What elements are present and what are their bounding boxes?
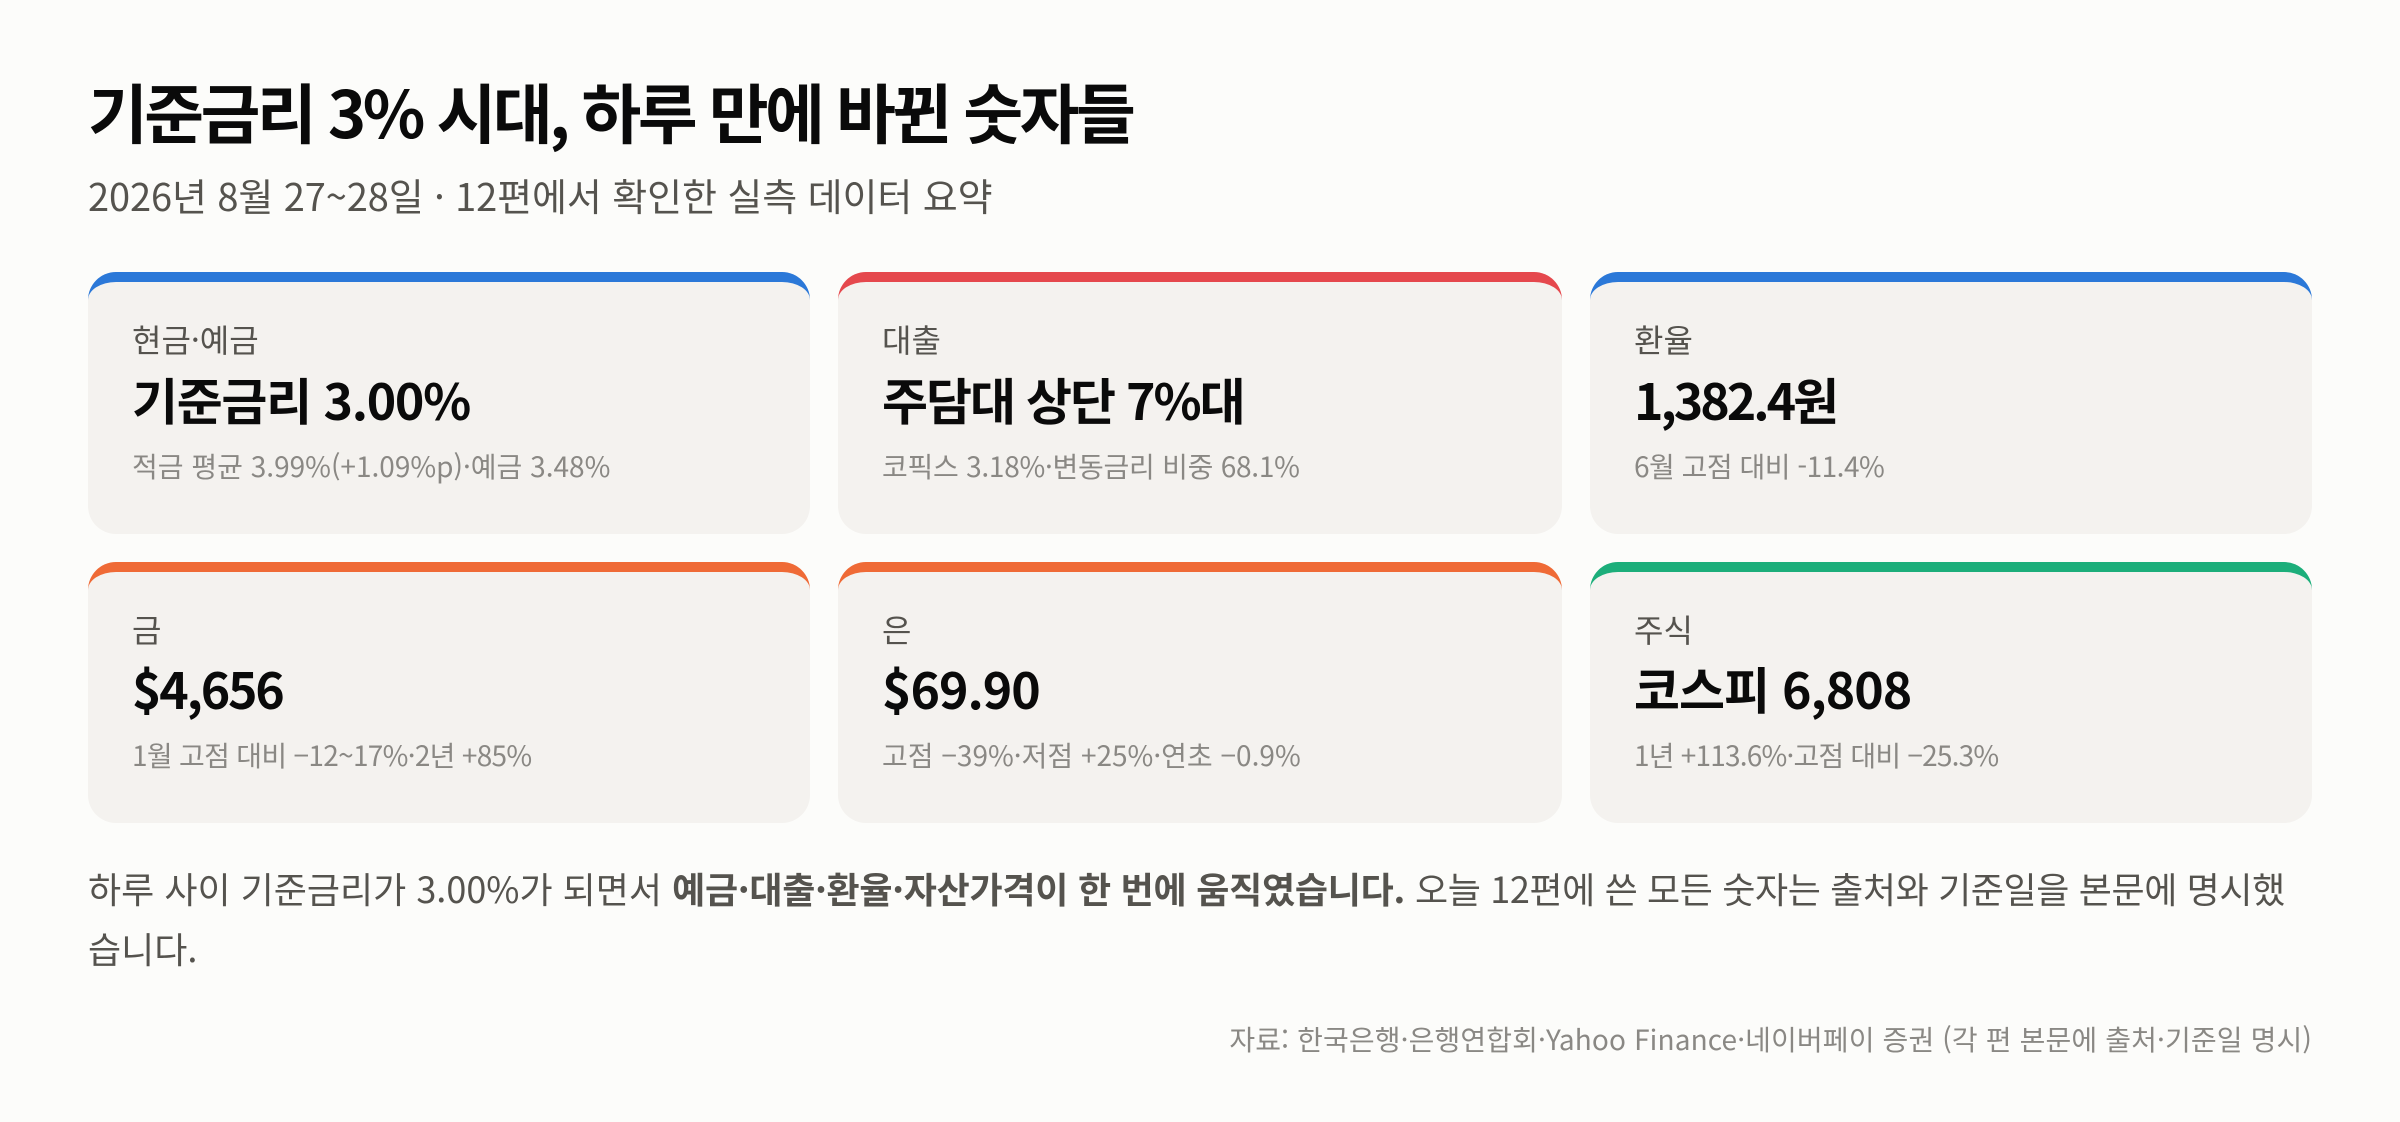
card value: 1,382.4원 [1634,363,1836,435]
summary text: 습니다. [88,922,197,974]
source note: 자료: 한국은행·은행연합회·Yahoo Finance·네이버페이 증권 (각 편 본문에 출처·기준일 명시) [1229,1019,2312,1059]
card value: 기준금리 3.00% [132,363,470,435]
card value: $4,656 [132,652,283,724]
card value: $69.90 [882,652,1040,724]
card note: 적금 평균 3.99%(+1.09%p)·예금 3.48% [132,446,610,486]
card note: 고점 −39%·저점 +25%·연초 −0.9% [882,735,1301,775]
summary text [88,862,2285,974]
panel: 은 [838,562,1562,822]
card label: 대출 [882,316,941,362]
card note: 1월 고점 대비 −12~17%·2년 +85% [132,735,531,775]
card value: 주담대 상단 7%대 [882,363,1244,435]
panel: 대출 [838,272,1562,534]
summary text: 하루 사이 기준금리가 3.00%가 되면서 예금·대출·환율·자산가격이 한 번에 움직였습니다. 오늘 12편에 쓴 모든 숫자는 출처와 기준일을 본문에 명시했 [88,862,2285,914]
title: 기준금리 3% 시대, 하루 만에 바뀐 숫자들 [88,63,1132,157]
subtitle: 2026년 8월 27~28일 · 12편에서 확인한 실측 데이터 요약 [88,167,993,222]
card note: 6월 고점 대비 -11.4% [1634,446,1884,486]
panel: 주식 [1590,562,2312,822]
card label: 환율 [1634,316,1693,362]
card label: 현금·예금 [132,316,259,362]
card note: 1년 +113.6%·고점 대비 −25.3% [1634,735,1998,775]
card value: 코스피 6,808 [1634,652,1911,724]
card label: 은 [882,606,911,652]
card note: 코픽스 3.18%·변동금리 비중 68.1% [882,446,1300,486]
panel: 금 [88,562,810,822]
card label: 주식 [1634,606,1693,652]
panel: 현금·예금 [88,272,810,534]
panel: 환율 [1590,272,2312,534]
card label: 금 [132,606,161,652]
